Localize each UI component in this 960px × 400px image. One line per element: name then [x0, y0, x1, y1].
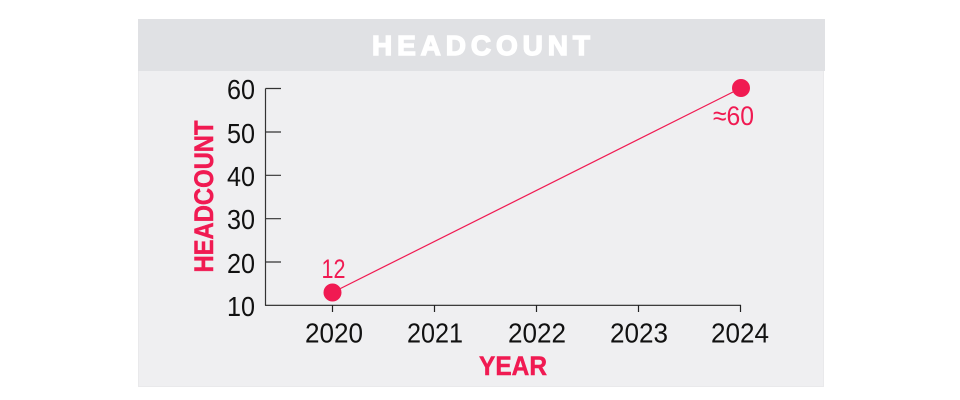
y axis tick labels: 50: [227, 118, 255, 149]
y axis: [227, 74, 281, 322]
title: HEADCOUNT: [372, 30, 590, 61]
data label 12: 12: [322, 254, 346, 284]
x axis tick labels: 2020: [305, 318, 363, 348]
x axis tick labels: 2024: [711, 318, 769, 348]
x axis tick labels: 2023: [610, 318, 668, 348]
y axis title: HEADCOUNT: [189, 120, 219, 272]
panel: headcount card: [138, 19, 825, 387]
y axis tick labels: 40: [227, 161, 255, 192]
x axis: [265, 305, 769, 348]
data label 60: ≈60: [713, 101, 754, 131]
y axis tick labels: 20: [227, 248, 255, 279]
x axis tick labels: 2022: [508, 318, 566, 348]
data point 2024: [732, 79, 750, 97]
y axis tick labels: [227, 74, 255, 322]
data point 2020: [324, 284, 342, 302]
x axis tick labels: 2021: [407, 318, 463, 348]
y axis tick labels: 60: [227, 74, 255, 105]
panel header band: [138, 19, 825, 71]
y axis tick labels: 10: [227, 291, 255, 322]
y axis tick labels: 30: [227, 204, 255, 235]
x axis tick labels: [305, 318, 769, 348]
x axis title: YEAR: [479, 351, 547, 381]
line series: [322, 79, 754, 302]
